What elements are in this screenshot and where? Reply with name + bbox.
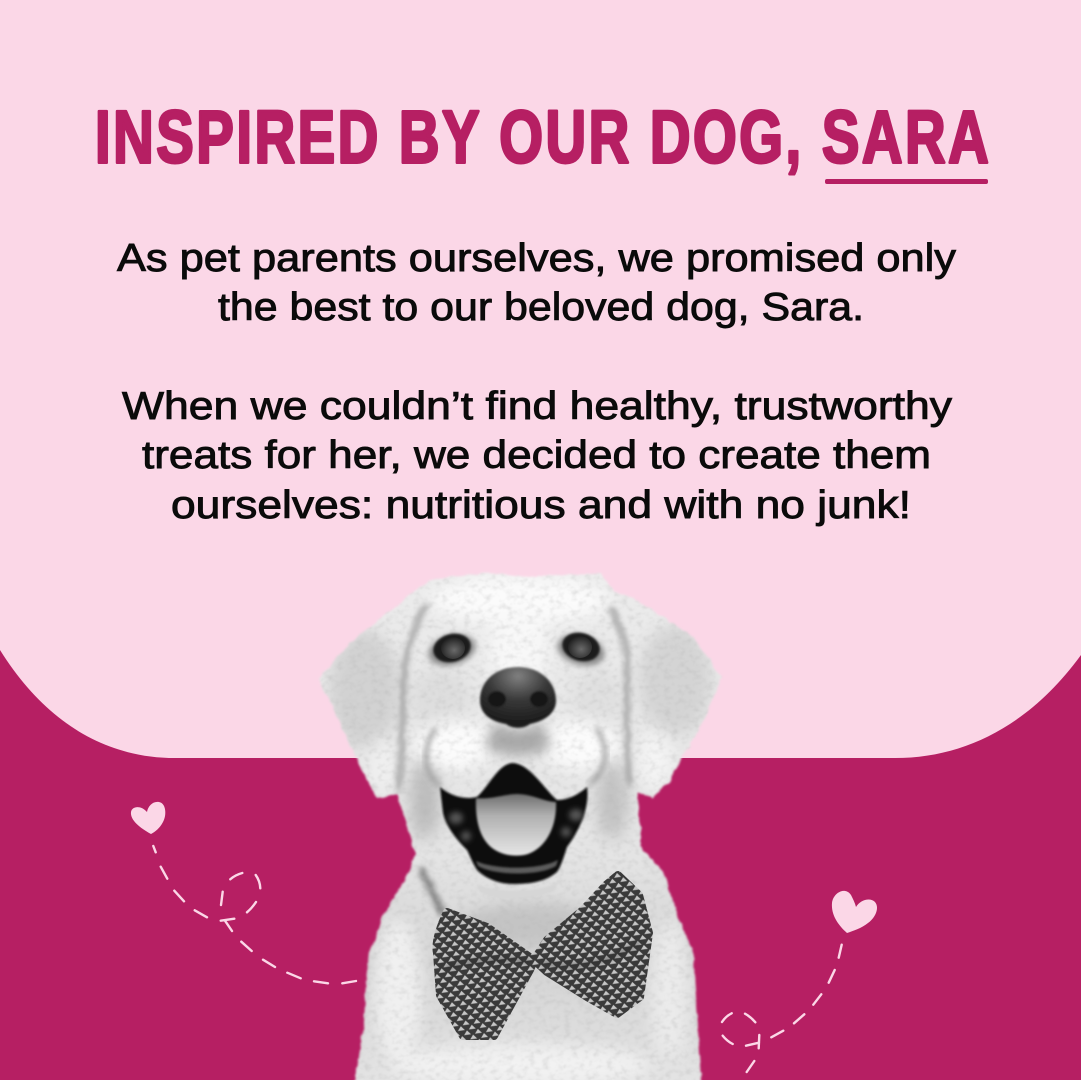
right eye — [554, 629, 608, 671]
left heart with dashed trail — [131, 802, 356, 983]
open mouth — [440, 763, 588, 884]
left dashed looping trail — [153, 846, 356, 983]
intro text block: As pet parents ourselves, we promised only — [117, 237, 957, 280]
story text block: treats for her, we decided to create them — [142, 434, 931, 477]
title underline — [825, 179, 988, 184]
left gums — [449, 812, 471, 841]
icon: right heart — [832, 891, 877, 933]
nose — [480, 667, 556, 728]
bow tie — [436, 875, 649, 1036]
icon: left heart — [131, 802, 165, 834]
left eye — [425, 629, 479, 671]
smile crease right — [590, 728, 605, 784]
muzzle shadow under nose — [484, 722, 552, 755]
inner ear shadow lines — [398, 603, 630, 790]
intro text block — [117, 237, 957, 329]
ear and face tones — [329, 576, 711, 1080]
intro text block: the best to our beloved dog, Sara. — [218, 286, 864, 329]
smile crease left — [426, 728, 440, 786]
story text block — [122, 385, 953, 527]
tongue — [476, 794, 556, 856]
right heart with dashed trail — [722, 891, 877, 1072]
dog silhouette with fur shading — [319, 572, 722, 1080]
title: INSPIRED BY OUR DOG, SARA — [95, 96, 989, 178]
lower lip and chin — [476, 860, 558, 899]
background: pink rounded panel — [0, 0, 1081, 758]
bow tie pleats — [445, 942, 640, 968]
bow tie left wing — [436, 912, 534, 1036]
right dashed looping trail — [722, 945, 842, 1072]
bow tie right wing — [534, 875, 649, 1014]
collar shadow — [420, 868, 444, 915]
right gums — [561, 809, 583, 837]
story text block: When we couldn’t find healthy, trustworthy — [122, 385, 953, 428]
dog photo illustration — [319, 572, 722, 1080]
story text block: ourselves: nutritious and with no junk! — [171, 484, 911, 527]
